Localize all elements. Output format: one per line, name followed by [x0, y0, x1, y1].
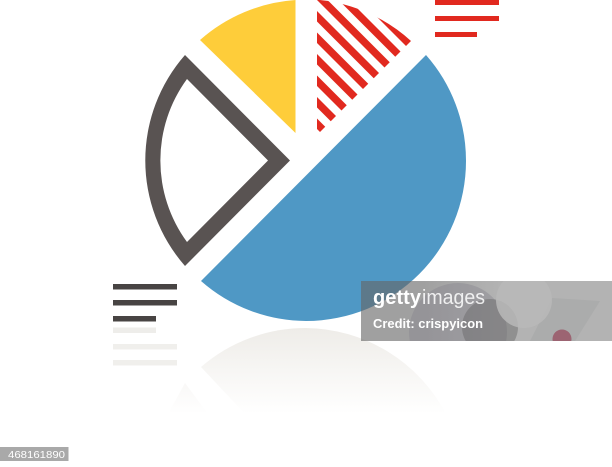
pie slice: blue [201, 55, 466, 321]
legend: dark lines [113, 284, 177, 322]
watermark credit text: Credit: crispyicon [373, 316, 483, 331]
pie slice: red stripes [317, 0, 411, 132]
watermark logo text: images [422, 287, 485, 309]
image id tag [0, 447, 68, 461]
watermark panel [361, 281, 612, 341]
legend: red lines [435, 0, 499, 37]
pie slice: yellow [200, 0, 296, 133]
watermark logo text: getty [373, 287, 422, 309]
pie slice: grey outline [145, 55, 290, 266]
reflection of the pie and legend [113, 328, 446, 414]
image id tag: 468161890 [8, 449, 65, 461]
watermark decorative shapes [409, 283, 572, 341]
